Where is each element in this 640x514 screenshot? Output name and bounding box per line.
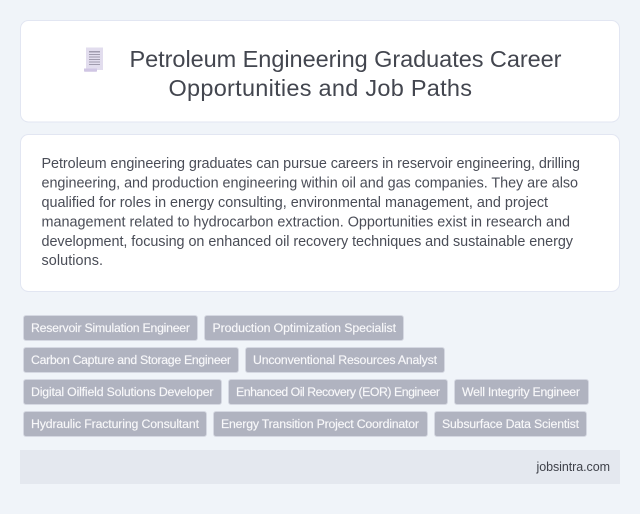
tag: Reservoir Simulation Engineer: Reservoir Simulation Engineer	[31, 321, 190, 335]
tag: Unconventional Resources Analyst: Unconventional Resources Analyst	[253, 353, 438, 367]
tag: Production Optimization Specialist	[204, 316, 404, 340]
tag: Carbon Capture and Storage Engineer: Carbon Capture and Storage Engineer	[31, 353, 231, 367]
tag: Well Integrity Engineer: Well Integrity Engineer	[462, 385, 580, 399]
tag: Enhanced Oil Recovery (EOR) Engineer	[228, 380, 448, 404]
description text: development, focusing on enhanced oil recovery techniques and sustainable energy	[42, 234, 574, 250]
tag: Energy Transition Project Coordinator	[214, 412, 428, 436]
tag: Subsurface Data Scientist: Subsurface Data Scientist	[442, 417, 580, 431]
tag: Production Optimization Specialist: Production Optimization Specialist	[212, 321, 397, 335]
tag: Energy Transition Project Coordinator: Energy Transition Project Coordinator	[221, 417, 419, 431]
footer bar	[20, 450, 620, 484]
tag: Well Integrity Engineer	[454, 380, 588, 404]
description text: qualified for roles in energy consulting, environmental management, and project	[42, 195, 548, 211]
description text: engineering, and production engineering within oil and gas companies. They are also	[42, 176, 578, 192]
icon: petroleum document scroll	[84, 48, 103, 72]
description text: Petroleum engineering graduates can pursue careers in reservoir engineering, drilling	[42, 156, 580, 172]
title: Opportunities and Job Paths	[168, 75, 472, 101]
tag: Reservoir Simulation Engineer	[24, 316, 198, 340]
tag: Hydraulic Fracturing Consultant	[24, 412, 206, 436]
tag list	[24, 316, 588, 436]
tag: Digital Oilfield Solutions Developer: Digital Oilfield Solutions Developer	[31, 385, 214, 399]
tag: Unconventional Resources Analyst	[246, 348, 444, 372]
tag: Carbon Capture and Storage Engineer	[24, 348, 238, 372]
tag: Enhanced Oil Recovery (EOR) Engineer: Enhanced Oil Recovery (EOR) Engineer	[236, 385, 440, 399]
title	[130, 46, 562, 101]
description text: management related to hydrocarbon extraction. Opportunities exist in research and	[42, 214, 570, 230]
panel: title card	[20, 20, 620, 122]
panel: description card	[20, 134, 620, 292]
footer source text: jobsintra.com	[536, 460, 610, 474]
tag: Subsurface Data Scientist	[434, 412, 586, 436]
tag: Digital Oilfield Solutions Developer	[24, 380, 222, 404]
tag: Hydraulic Fracturing Consultant: Hydraulic Fracturing Consultant	[31, 417, 200, 431]
title: Petroleum Engineering Graduates Career	[130, 46, 562, 72]
description text	[42, 156, 580, 269]
description text: solutions.	[42, 253, 103, 269]
